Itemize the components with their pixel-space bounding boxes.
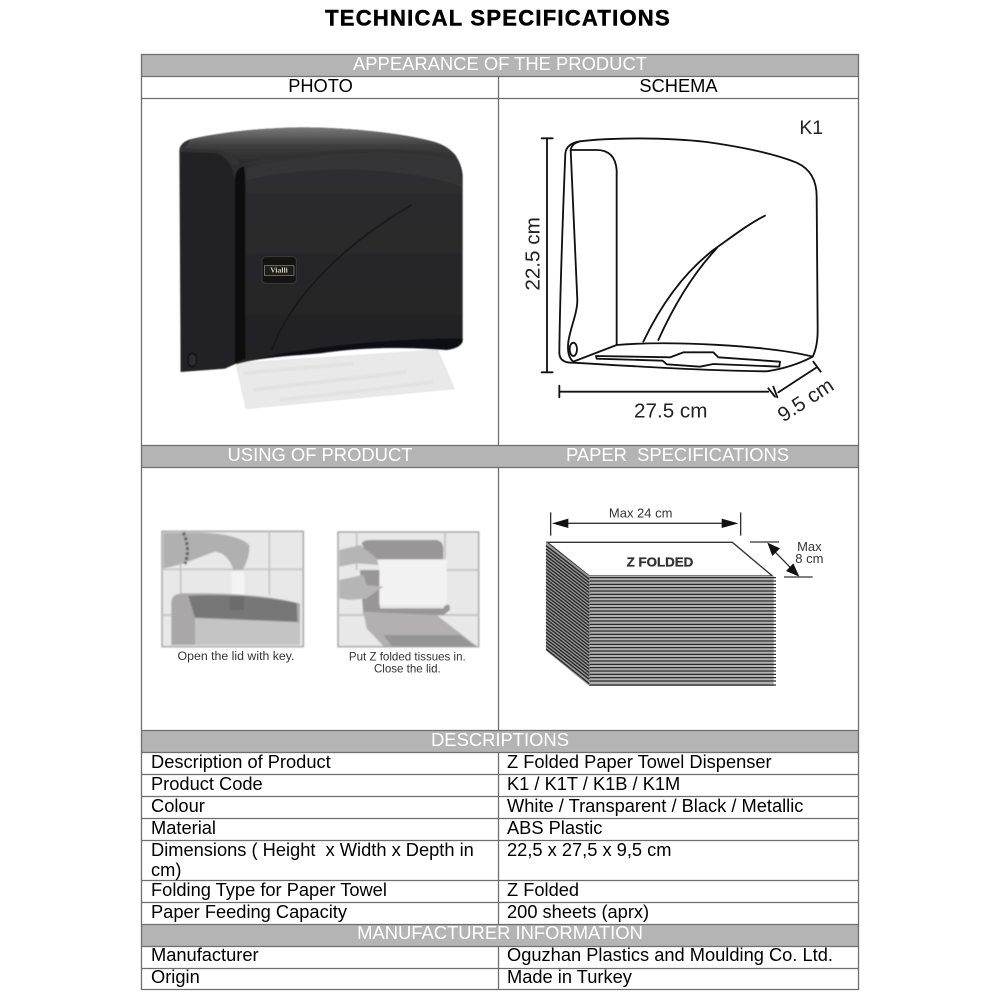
label K1: K1 <box>799 118 823 139</box>
heading: manufacturer information: MANUFACTURER INFORMATION <box>357 922 643 943</box>
logo badge: Vialli <box>270 265 289 274</box>
rows: manufacturer labels: Manufacturer <box>151 944 259 965</box>
rows: manufacturer labels <box>151 944 259 987</box>
rows: description labels: Description of Product <box>151 751 331 772</box>
rows: description labels: cm) <box>151 859 181 880</box>
heading: using of product: USING OF PRODUCT <box>228 444 412 465</box>
dimension: depth: 9.5 cm <box>774 374 838 427</box>
heading: photo: PHOTO <box>288 75 353 96</box>
rows: manufacturer values: Oguzhan Plastics and Moulding Co. Ltd. <box>507 944 833 965</box>
rows: description labels: Paper Feeding Capacity <box>151 901 348 922</box>
rows: description values <box>507 751 803 922</box>
logo badge <box>262 257 296 283</box>
step 1 caption: Open the lid with key. <box>178 649 294 663</box>
rows: description labels <box>151 751 474 922</box>
rows: description values: White / Transparent / Black / Metallic <box>507 795 803 816</box>
paper towel <box>236 350 454 409</box>
rows: description labels: Colour <box>151 795 205 816</box>
dimension: max 24 cm <box>551 505 741 536</box>
dimension: height: 22.5 cm <box>521 217 544 291</box>
panel: specification table frame <box>142 54 858 990</box>
rows: manufacturer values: Made in Turkey <box>507 966 633 987</box>
rows: description values: Z Folded <box>507 879 579 900</box>
heading: descriptions: DESCRIPTIONS <box>431 729 569 750</box>
rows: description values: 22,5 x 27,5 x 9,5 cm <box>507 839 671 860</box>
rows: description labels: Product Code <box>151 773 263 794</box>
heading: schema: SCHEMA <box>639 75 718 96</box>
stack side face <box>546 542 589 686</box>
rows: description values: K1 / K1T / K1B / K1M <box>507 773 680 794</box>
dispenser body <box>179 127 463 372</box>
rows: manufacturer labels: Origin <box>151 966 200 987</box>
step 1 photo <box>162 531 303 647</box>
schema: dimension drawing K1 <box>521 118 838 427</box>
stack front face <box>589 576 774 686</box>
heading: appearance of the product: APPEARANCE OF THE PRODUCT <box>353 53 647 74</box>
step 2 caption: Close the lid. <box>374 663 441 675</box>
dimension: max 24 cm: Max 24 cm <box>609 505 672 520</box>
dimension: max 8 cm <box>750 539 823 577</box>
step 2 photo <box>338 532 479 647</box>
heading: paper specifications: PAPER SPECIFICATIONS <box>566 444 789 465</box>
dimension: max 8 cm: Max <box>797 539 822 554</box>
label Z FOLDED: Z FOLDED <box>627 554 694 569</box>
rows: description values: ABS Plastic <box>507 817 602 838</box>
dimension: width <box>559 386 777 422</box>
rows: manufacturer values <box>507 944 833 987</box>
step 2 caption <box>349 651 466 675</box>
rows: description labels: Material <box>151 817 216 838</box>
rows: description labels: Folding Type for Paper Towel <box>151 879 387 900</box>
dispenser outline <box>559 138 818 371</box>
dimension: max 8 cm: 8 cm <box>795 551 823 566</box>
usage step 1 <box>162 531 303 663</box>
step 2 caption: Put Z folded tissues in. <box>349 651 466 663</box>
title: TECHNICAL SPECIFICATIONS <box>325 6 671 30</box>
usage step 2 <box>338 532 479 675</box>
stack top <box>547 542 772 576</box>
rows: description values: 200 sheets (aprx) <box>507 901 649 922</box>
rows: description labels: Dimensions ( Height x Width x Depth in <box>151 839 474 860</box>
dimension: width: 27.5 cm <box>634 399 707 422</box>
photo: black paper towel dispenser <box>179 127 463 409</box>
rows: description values: Z Folded Paper Towel Dispenser <box>507 751 772 772</box>
paper stack: Z folded with max dimensions <box>546 505 823 686</box>
dimension: height <box>521 138 553 372</box>
